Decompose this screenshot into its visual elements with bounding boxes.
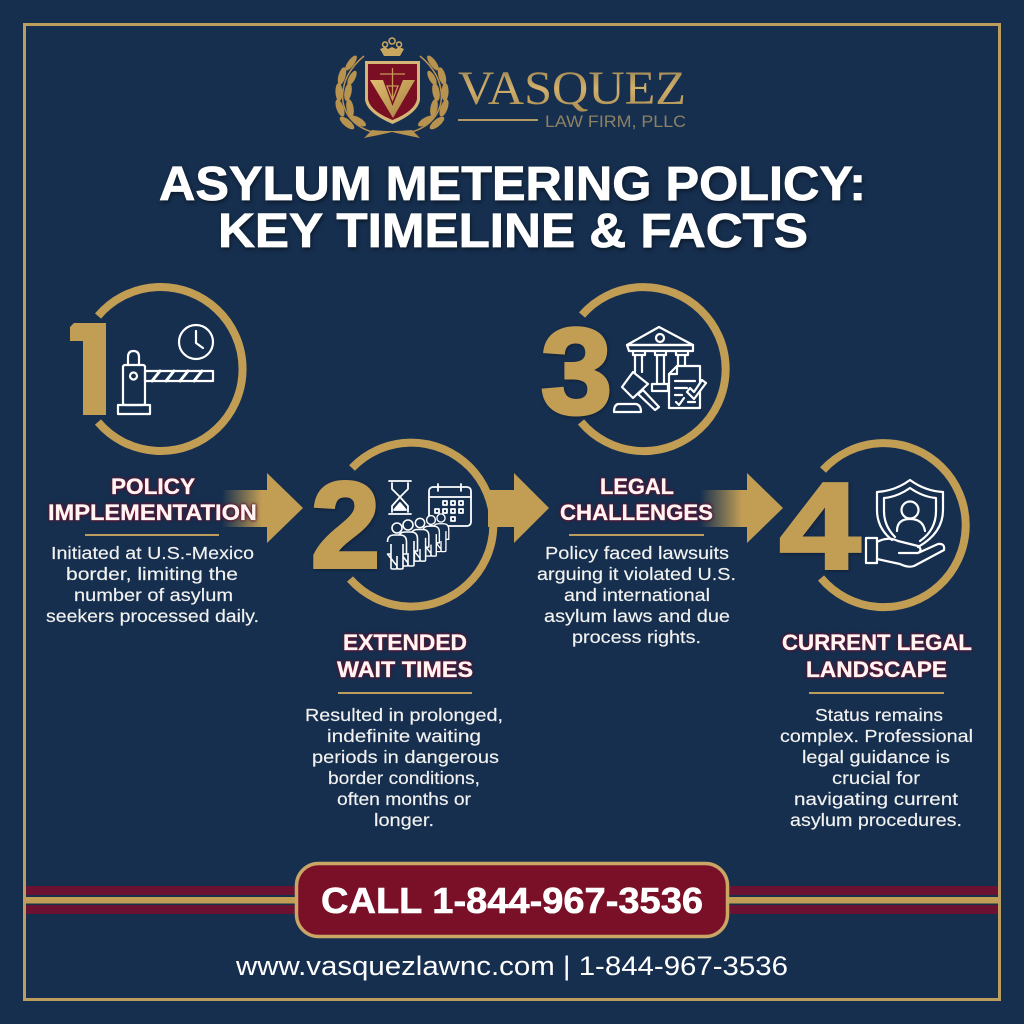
number 2: 2	[311, 457, 380, 593]
icon: shield	[365, 61, 420, 124]
body text 2	[305, 705, 503, 830]
number 3: 3	[541, 303, 612, 439]
panel: step 1 policy implementation	[46, 287, 259, 626]
ring 1	[98, 287, 243, 451]
heading 2	[337, 630, 473, 682]
body text 3: asylum laws and due	[544, 606, 730, 626]
body text 1: seekers processed daily.	[46, 606, 259, 626]
heading 3	[560, 474, 713, 525]
title: ASYLUM METERING POLICY:	[159, 158, 866, 211]
body text 4: navigating current	[794, 789, 958, 809]
ring 4	[821, 443, 966, 607]
icon: hourglass, calendar and queue	[388, 481, 471, 569]
divider 2	[338, 692, 472, 694]
panel: step 4 current legal landscape	[780, 443, 973, 830]
icon: courthouse, gavel and document	[614, 327, 706, 412]
body text 4: legal guidance is	[802, 747, 950, 767]
body text 1	[46, 543, 259, 626]
number 4: 4	[780, 458, 860, 594]
body text 3: process rights.	[572, 627, 701, 647]
arrow: step 3 to 4	[700, 473, 783, 543]
body text 3: arguing it violated U.S.	[537, 564, 736, 584]
call to action button	[296, 864, 728, 936]
body text 1: Initiated at U.S.-Mexico	[51, 543, 254, 563]
divider 1	[85, 534, 219, 536]
heading 1: IMPLEMENTATION	[48, 500, 257, 525]
panel: step 3 legal challenges	[537, 287, 736, 647]
heading 3: LEGAL	[600, 474, 674, 499]
body text 4: asylum procedures.	[790, 810, 962, 830]
icon: laurel wreath	[334, 54, 450, 138]
body text 2: often months or	[337, 789, 471, 809]
brand name: VASQUEZ	[458, 62, 686, 115]
icon: shield, person and hand	[866, 480, 944, 567]
heading 2: WAIT TIMES	[337, 657, 473, 682]
body text 1: number of asylum	[74, 585, 233, 605]
heading 4: CURRENT LEGAL	[782, 630, 972, 655]
heading 4: LANDSCAPE	[806, 657, 947, 682]
divider 4	[809, 692, 944, 694]
brand subtitle: LAW FIRM, PLLC	[545, 113, 686, 131]
body text 4: crucial for	[832, 768, 920, 788]
body text 2: longer.	[374, 810, 434, 830]
divider 3	[569, 534, 704, 536]
body text 4: complex. Professional	[780, 726, 973, 746]
heading 1	[48, 474, 257, 525]
heading 3: CHALLENGES	[560, 500, 713, 525]
body text 1: border, limiting the	[66, 564, 238, 584]
icon: barrier gate and clock	[118, 325, 213, 414]
ring 3	[581, 287, 726, 451]
call to action button: CALL 1-844-967-3536	[321, 880, 703, 921]
body text 4: Status remains	[815, 705, 943, 725]
panel: step 2 extended wait times	[305, 443, 503, 830]
body text 3: and international	[564, 585, 710, 605]
number 1: 1	[70, 308, 112, 444]
arrow: step 2 to 3	[488, 473, 549, 543]
title: KEY TIMELINE & FACTS	[218, 205, 808, 258]
title	[159, 158, 866, 258]
body text 2: Resulted in prolonged,	[305, 705, 503, 725]
icon: crown	[380, 38, 404, 56]
body text 2: indefinite waiting	[327, 726, 481, 746]
banner stripes	[26, 886, 998, 914]
body text 2: periods in dangerous	[312, 747, 499, 767]
body text 2: border conditions,	[328, 768, 480, 788]
body text 3: Policy faced lawsuits	[545, 543, 729, 563]
body text 3	[537, 543, 736, 647]
heading 1: POLICY	[111, 474, 195, 499]
arrow: step 1 to 2	[222, 473, 303, 543]
brand divider	[458, 119, 538, 121]
logo: Vasquez Law Firm	[334, 38, 686, 138]
heading 4	[782, 630, 972, 682]
footer contact line: www.vasquezlawnc.com | 1-844-967-3536	[235, 951, 788, 981]
ring 2	[350, 443, 493, 607]
body text 4	[780, 705, 973, 830]
heading 2: EXTENDED	[343, 630, 467, 655]
